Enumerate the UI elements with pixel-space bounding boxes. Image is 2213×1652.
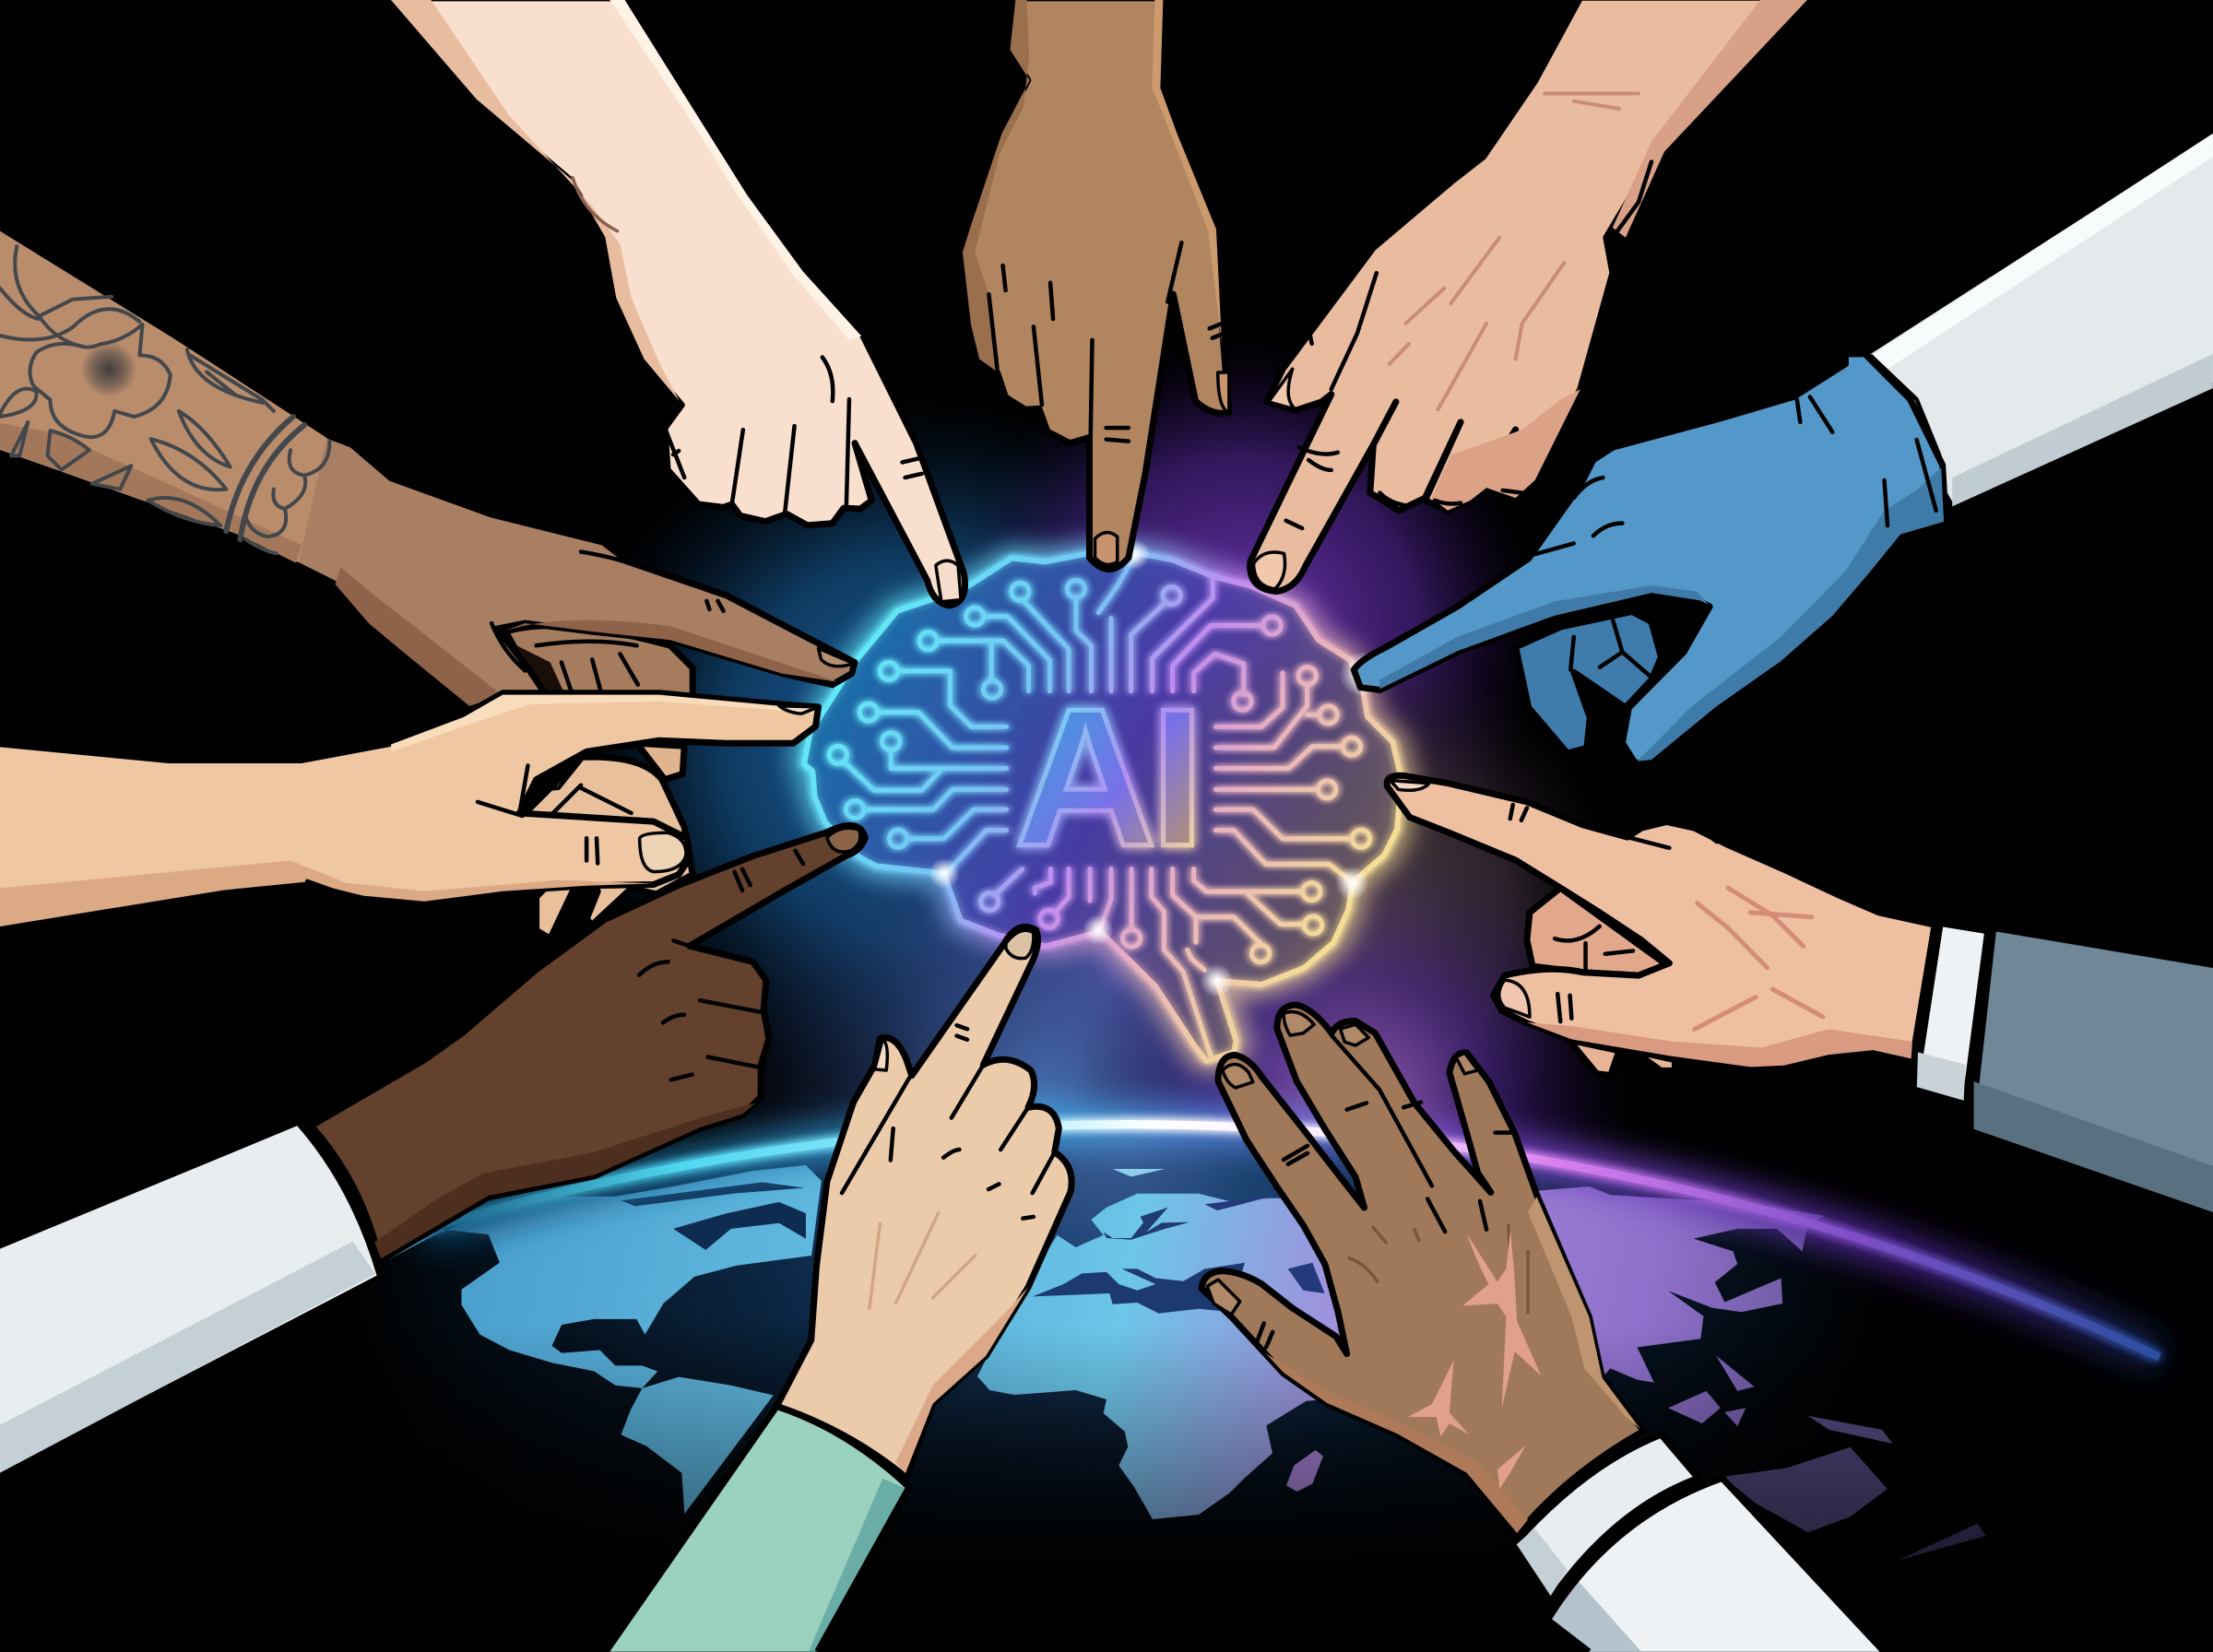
globe ocean — [353, 1122, 2202, 1652]
skin — [0, 693, 819, 929]
left shade — [963, 0, 1030, 371]
bottom shade — [1527, 1022, 1912, 1067]
finger creases — [527, 760, 632, 816]
thumb nail — [1218, 372, 1229, 413]
finger lines — [1510, 805, 1717, 1021]
continents: Europe and Africa — [977, 1169, 1383, 1519]
hand: brown with scars, bottom right — [1201, 1005, 1884, 1652]
Baltic — [1104, 1208, 1189, 1240]
hand: light skin from left — [0, 693, 819, 938]
ocean fade — [353, 1312, 2202, 1652]
grey suit sleeve — [1971, 927, 2213, 1217]
knuckle lines — [491, 552, 724, 671]
continents: Indonesia — [1668, 1356, 1755, 1426]
forearm lower shade — [0, 422, 302, 563]
scars — [1462, 1230, 1541, 1409]
AI lettering: I — [1150, 668, 1205, 888]
land fade — [353, 1326, 2202, 1652]
hand: dark skin from lower left — [0, 825, 865, 1477]
lower edge tone — [1266, 1354, 1528, 1533]
cuff shade — [1917, 1052, 1965, 1101]
thumb nail — [640, 832, 686, 872]
sparkles — [929, 539, 1385, 997]
nail — [819, 648, 854, 667]
under finger lines — [1570, 620, 1651, 678]
gap under palm — [516, 645, 564, 696]
sleeve shade — [809, 1479, 908, 1652]
shirt cuff — [1915, 923, 1988, 1102]
finger lines — [1257, 1035, 1512, 1347]
circuit traces — [829, 556, 1370, 1056]
coat shade — [1549, 1578, 1641, 1652]
finger lines — [665, 357, 922, 512]
globe — [353, 1122, 2202, 1652]
nail — [936, 560, 961, 602]
coat sleeve fill — [1547, 1478, 1884, 1652]
sleeve shade — [0, 1242, 375, 1473]
shirt cuff — [1515, 1434, 1698, 1599]
cuff shade — [1517, 1528, 1568, 1596]
finger creases — [537, 642, 638, 690]
thumb nail — [1269, 369, 1296, 409]
edge shade — [335, 567, 838, 706]
Madagascar — [1286, 1450, 1323, 1492]
hand: blue glove from right — [1354, 122, 2213, 763]
glove creases — [1529, 357, 1939, 556]
knuckle lines — [531, 851, 803, 1080]
left shade — [390, 0, 680, 401]
thumb and wrist lines — [307, 766, 598, 891]
Caspian — [1205, 1195, 1325, 1293]
index nail — [779, 706, 819, 714]
finger lines — [1286, 161, 1651, 528]
knuckle shade — [1431, 389, 1580, 511]
brain halo — [804, 552, 1402, 1061]
Mediterranean — [1033, 1263, 1245, 1314]
bottom shade — [0, 860, 654, 927]
lower fingers — [1568, 1040, 1675, 1075]
sleeve shade — [1952, 354, 2213, 506]
upper finger sliver — [637, 743, 684, 780]
continents: North America — [377, 1165, 822, 1388]
glove — [1354, 354, 1946, 763]
tattoo — [0, 246, 329, 553]
skin — [311, 825, 865, 1261]
scars — [1695, 888, 1823, 1029]
curled fingers under index — [505, 626, 692, 702]
hand: peach from top right — [1250, 0, 1810, 592]
under fingers — [1516, 611, 1662, 753]
wrist crease — [573, 178, 618, 231]
nail — [1006, 930, 1034, 959]
finger lines — [988, 242, 1226, 442]
Greenland fragment — [1113, 1169, 1165, 1176]
hand: pale from top left — [388, 0, 964, 606]
skin — [961, 0, 1229, 569]
skin — [776, 926, 1071, 1478]
sleeve shade — [1974, 1081, 2213, 1213]
curled finger — [1527, 888, 1666, 975]
nails — [1207, 1012, 1478, 1315]
tattoo shading dots — [81, 341, 136, 397]
right highlight — [1152, 0, 1222, 344]
continents: Oceania — [1723, 1416, 1986, 1560]
Hudson bay — [673, 1202, 806, 1250]
right highlight — [609, 0, 861, 340]
shade — [374, 1103, 755, 1258]
curled fingers behind — [525, 757, 692, 938]
index underside shade — [1379, 585, 1709, 689]
thumb nail — [1499, 980, 1530, 1017]
nail — [1391, 780, 1429, 790]
vein marks — [1349, 1225, 1528, 1313]
central glow — [423, 282, 1835, 1552]
brain outline — [804, 552, 1402, 1061]
skin — [1201, 1005, 1643, 1535]
hand: tattooed forearm, upper left — [0, 226, 855, 707]
sleeve — [0, 1123, 380, 1477]
sleeve highlight — [1873, 134, 2213, 369]
skin — [388, 0, 964, 606]
skin — [0, 226, 855, 707]
nail — [827, 828, 860, 852]
right edge tone — [1528, 1197, 1640, 1429]
Arctic channels — [621, 1182, 804, 1206]
forearm shade — [1613, 0, 1808, 238]
finger lines — [842, 1025, 1055, 1219]
AI lettering: A — [1015, 668, 1156, 888]
curled finger lines — [1555, 926, 1633, 971]
hand: brown from top — [961, 0, 1229, 569]
nail — [1095, 533, 1118, 564]
continents: South America — [621, 1377, 774, 1514]
thumb nail — [875, 1040, 887, 1070]
atmosphere glow — [423, 1125, 2160, 1357]
nail — [1254, 552, 1285, 589]
skin — [1250, 0, 1810, 592]
top highlight — [391, 695, 810, 751]
forearm tone — [0, 229, 326, 561]
brain — [804, 552, 1402, 1061]
white sleeve — [1864, 122, 2213, 508]
hand: light skin from bottom — [606, 926, 1071, 1652]
wrist shade — [896, 1287, 1028, 1473]
coat outline — [1547, 1478, 1884, 1652]
skin — [1387, 775, 1935, 1068]
wrist shade — [1638, 467, 1944, 761]
continents: Asia — [1537, 1186, 1825, 1383]
sleeve outline — [606, 1406, 909, 1652]
green sleeve fill — [606, 1406, 909, 1652]
vein marks — [1390, 93, 1639, 409]
tendon marks — [870, 1213, 976, 1308]
atmosphere arc — [423, 1125, 2160, 1357]
hand: peach from right with grey suit — [1387, 775, 2213, 1217]
